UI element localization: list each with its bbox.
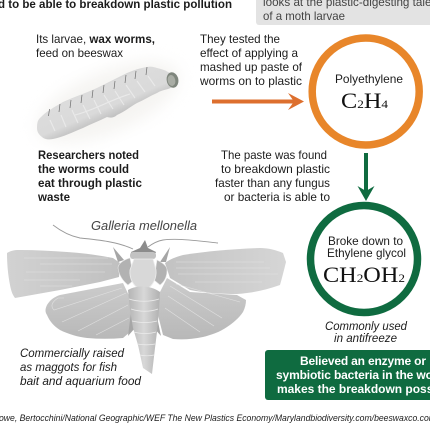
- test description: mashed up paste of: [200, 60, 303, 74]
- antifreeze caption: in antifreeze: [334, 331, 397, 345]
- moth caption: use: [20, 346, 141, 388]
- illustration: moth: [7, 225, 286, 374]
- intro box: [256, 0, 430, 25]
- arrow: orange: [212, 93, 304, 110]
- callout: enzyme: Believed an enzyme or: [300, 354, 426, 368]
- antifreeze caption: Commonly used: [325, 319, 407, 333]
- paste finding: faster than any fungus: [215, 176, 330, 190]
- larvae caption: [36, 32, 155, 60]
- researchers note: waste: [37, 190, 70, 204]
- larvae caption: Its larvae, wax worms,: [36, 32, 155, 46]
- antifreeze caption: [325, 319, 407, 345]
- lower wings: [46, 283, 132, 339]
- circle: polyethylene: C2H4: [341, 88, 388, 113]
- moth caption: use: as maggots for fish: [20, 360, 117, 374]
- moth caption: use: Commercially raised: [20, 346, 124, 360]
- researchers note: [37, 148, 142, 204]
- paste finding: to breakdown plastic: [221, 162, 330, 176]
- shoulders: [118, 258, 134, 285]
- thorax spikes: [113, 247, 170, 262]
- circle: polyethylene: [312, 38, 419, 145]
- thorax: [130, 259, 156, 289]
- test description: effect of applying a: [200, 46, 298, 60]
- circle: ethylene glycol: Ethylene glycol: [327, 246, 406, 260]
- circle: ethylene glycol: [310, 206, 418, 312]
- icon: wax worm: [26, 45, 190, 159]
- researchers note: eat through plastic: [38, 176, 142, 190]
- moth caption: use: bait and aquarium food: [20, 374, 141, 388]
- circle: ethylene glycol: Broke down to: [328, 234, 403, 248]
- antennae: [53, 225, 218, 249]
- upper wings: [7, 250, 120, 298]
- worm texture: [50, 76, 155, 131]
- worm head: [165, 71, 180, 89]
- test description: They tested the: [200, 32, 280, 46]
- moth caption: species: Galleria mellonella: [91, 219, 197, 233]
- paste finding: [215, 148, 330, 204]
- abdomen: [128, 286, 160, 374]
- test description: [199, 32, 303, 88]
- paste finding: or bacteria is able to: [224, 190, 330, 204]
- head: [131, 240, 156, 258]
- larvae caption: feed on beeswax: [36, 46, 123, 60]
- researchers note: Researchers noted: [38, 148, 139, 162]
- researchers note: the worms could: [38, 162, 129, 176]
- circle: ethylene glycol: CH 2OH 2: [323, 262, 405, 287]
- wing veins: [24, 258, 278, 335]
- arrow: green: [358, 153, 374, 201]
- circle: polyethylene: Polyethylene: [335, 72, 403, 86]
- test description: worms on to plastic: [199, 74, 302, 88]
- intro box: of a moth larvae: [263, 9, 345, 23]
- paste finding: The paste was found: [221, 148, 327, 162]
- worm segments: [48, 67, 147, 116]
- callout: enzyme: [265, 350, 430, 400]
